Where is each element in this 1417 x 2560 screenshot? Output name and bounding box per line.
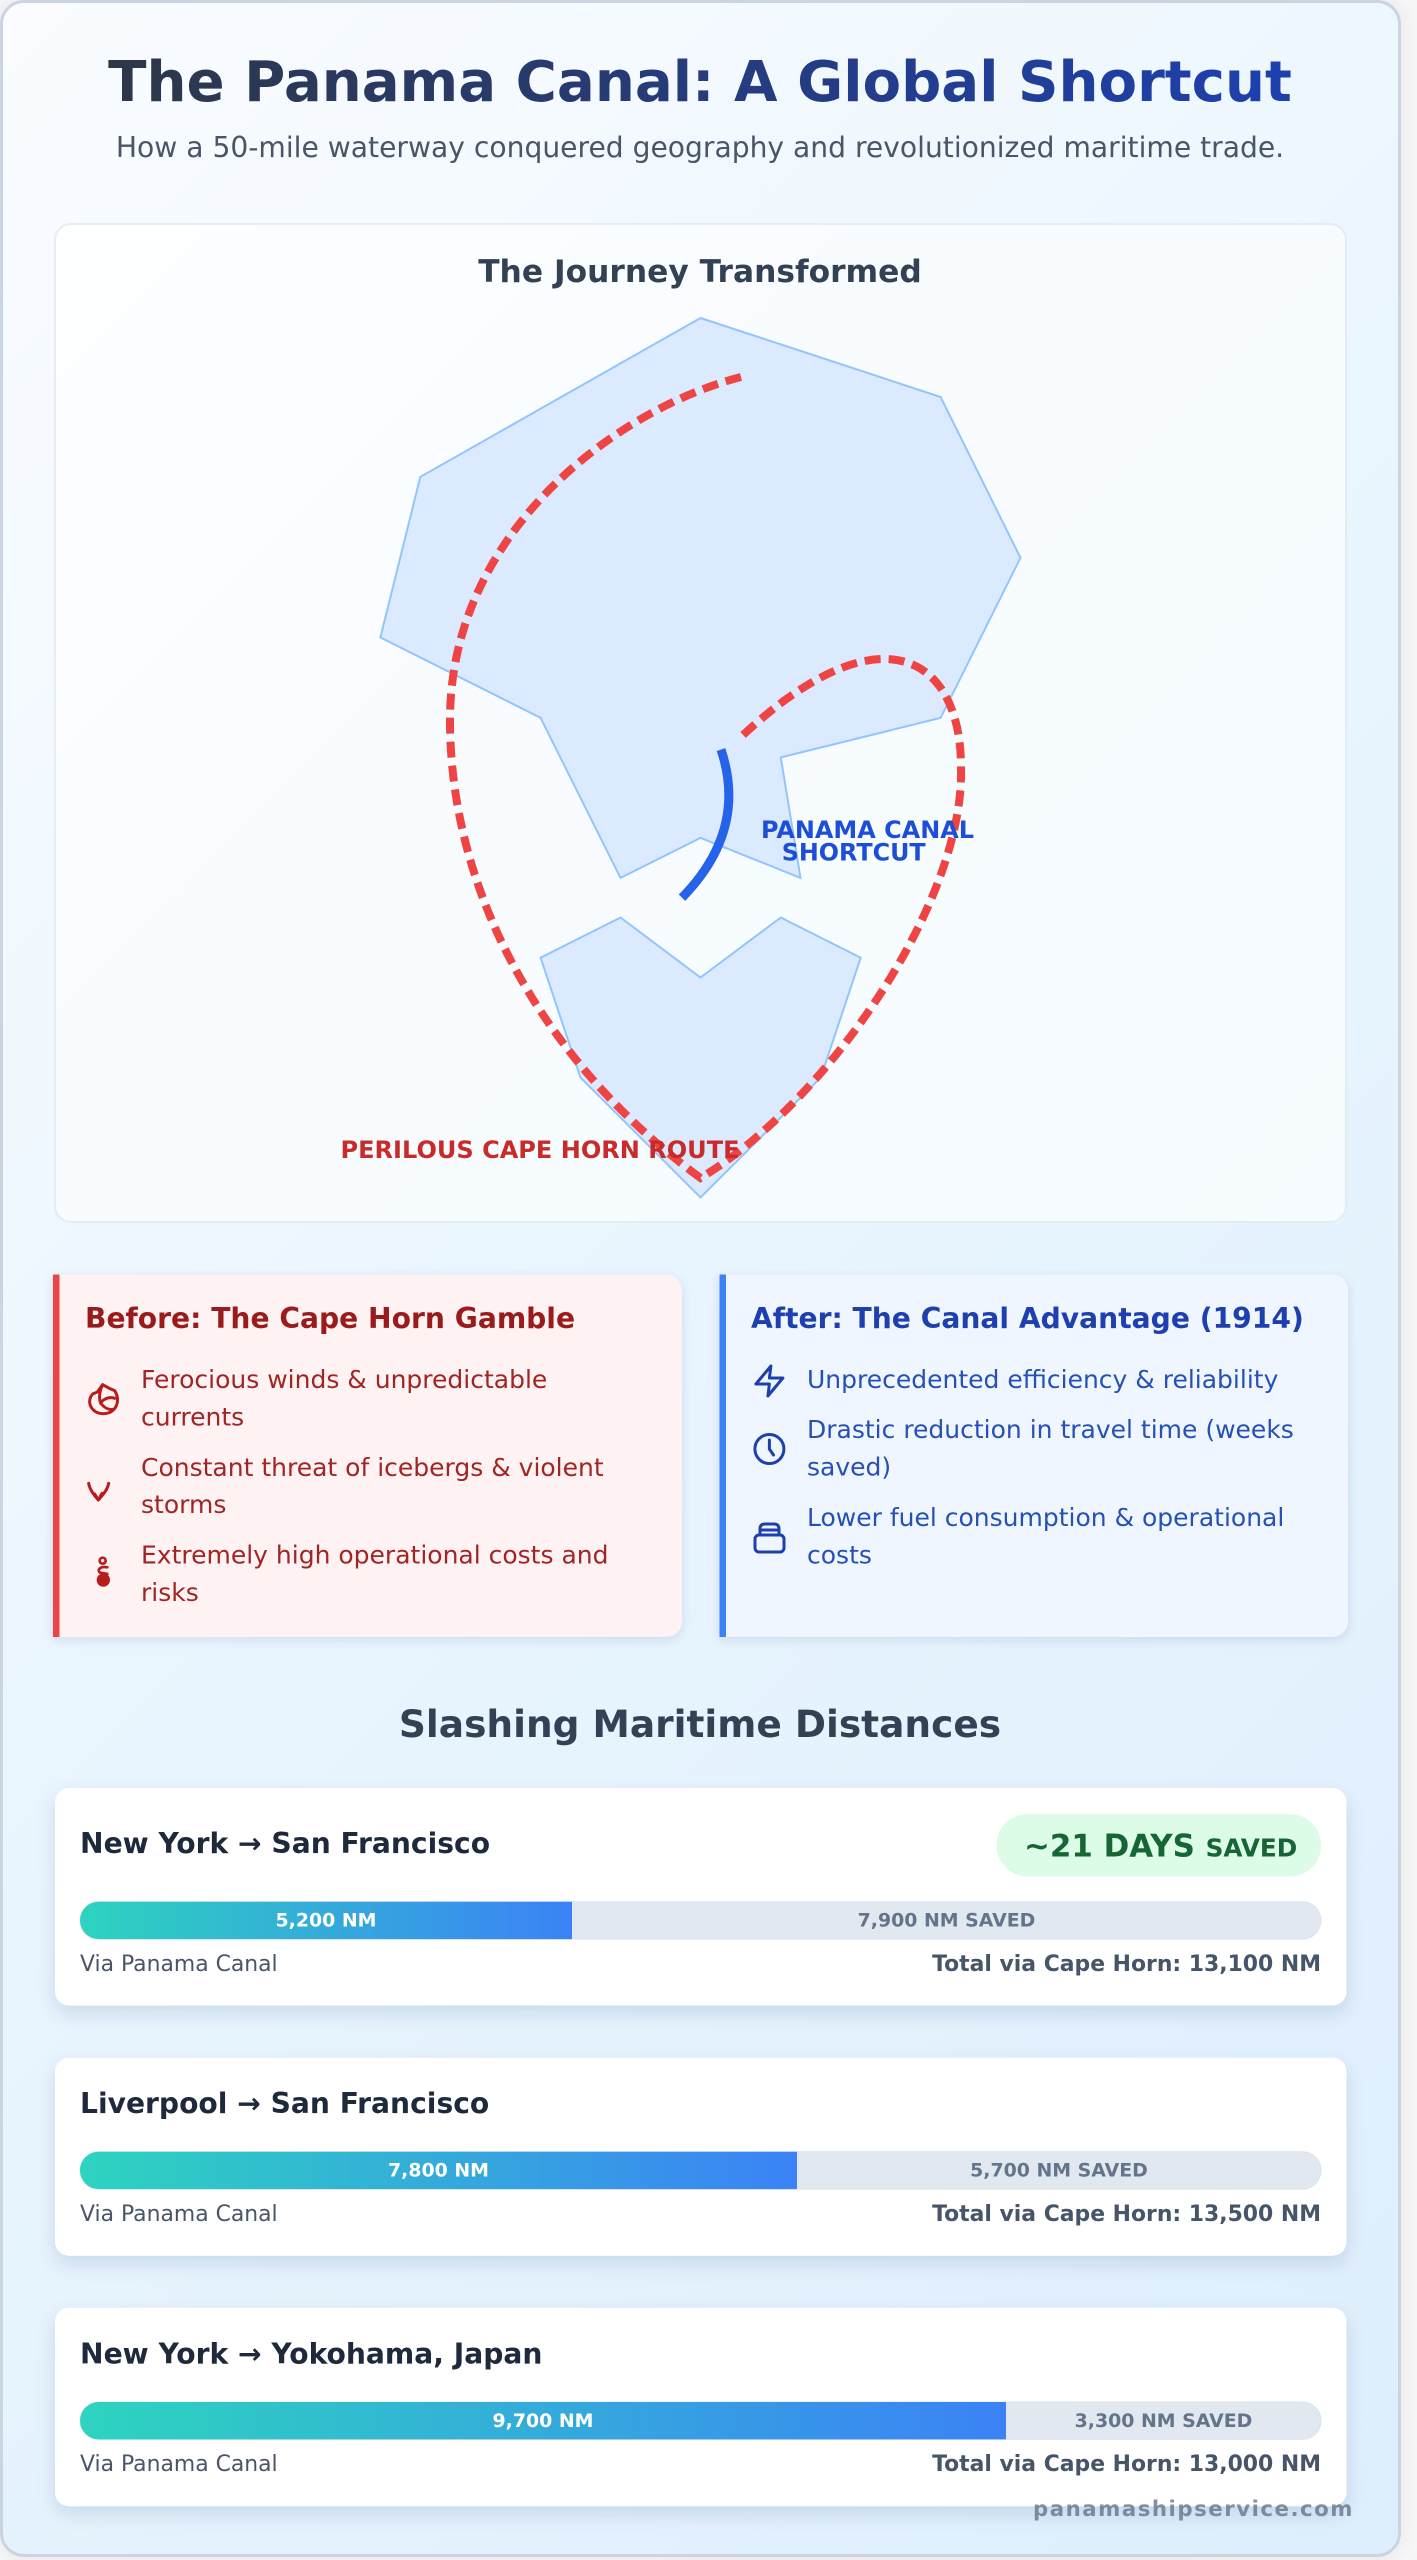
card: liverpool to san francisco — [55, 2058, 1346, 2256]
icon: fuel package — [755, 1524, 784, 1552]
panel: before — [53, 1274, 682, 1637]
bar chart: distance: 5,200 NM — [276, 1910, 376, 1932]
icon: clock — [755, 1434, 784, 1464]
badge: days saved: ~21 DAYS SAVED — [1024, 1828, 1297, 1864]
total label: Total via Cape Horn: 13,100 NM — [932, 1952, 1321, 1977]
after item 3: Lower fuel consumption & operational — [807, 1503, 1284, 1532]
via label: Via Panama Canal — [80, 1952, 278, 1977]
before item 1: Ferocious winds & unpredictable — [141, 1365, 547, 1394]
bar chart: distance: 7,800 NM — [388, 2160, 489, 2182]
after item 2: saved) — [807, 1452, 891, 1482]
icon: wind flame — [90, 1385, 118, 1414]
bar chart: distance — [80, 2402, 1321, 2439]
bar chart: distance: 5,700 NM SAVED — [970, 2160, 1148, 2182]
panel: the journey transformed map — [55, 224, 1346, 1222]
before item 2: Constant threat of icebergs & violent — [141, 1453, 604, 1482]
card: new york to san francisco — [55, 1788, 1346, 2006]
before item 1: currents — [141, 1402, 244, 1432]
subtitle: How a 50-mile waterway conquered geography and revolutionized maritime trade. — [116, 131, 1284, 164]
via label: Via Panama Canal — [80, 2452, 278, 2477]
watermark: panamashipservice.com — [1033, 2497, 1354, 2522]
icon: iceberg — [89, 1483, 109, 1500]
total label: Total via Cape Horn: 13,000 NM — [932, 2452, 1321, 2477]
panel: after — [720, 1274, 1348, 1637]
after item 3: costs — [807, 1540, 872, 1570]
route title: New York → San Francisco — [80, 1827, 490, 1860]
bar chart: distance: 9,700 NM — [493, 2410, 593, 2432]
via label: Via Panama Canal — [80, 2202, 278, 2227]
title: The Panama Canal: A Global Shortcut — [108, 50, 1292, 115]
label: perilous cape horn route: PERILOUS CAPE HORN ROUTE — [340, 1136, 740, 1164]
total label: Total via Cape Horn: 13,500 NM — [932, 2202, 1321, 2227]
before item 3: Extremely high operational costs and — [141, 1540, 608, 1570]
card: new york to yokohama — [55, 2308, 1346, 2506]
route: cape horn dashed route — [450, 377, 961, 1178]
icon: costs and risks — [98, 1558, 109, 1585]
label: panama canal shortcut — [761, 816, 974, 867]
before item 2: storms — [141, 1490, 226, 1519]
bar chart: distance — [80, 1902, 1321, 1939]
badge: days saved — [996, 1814, 1321, 1876]
map: north america landmass — [380, 318, 1020, 878]
bar chart: distance: 7,900 NM SAVED — [858, 1910, 1035, 1932]
after item 2: Drastic reduction in travel time (weeks — [807, 1415, 1294, 1444]
bar chart: distance: 3,300 NM SAVED — [1075, 2410, 1252, 2432]
before heading: Before: The Cape Horn Gamble — [85, 1302, 575, 1335]
bar chart: distance — [80, 2152, 1321, 2189]
icon: lightning bolt — [756, 1366, 783, 1396]
route title: Liverpool → San Francisco — [80, 2087, 489, 2120]
section heading: Slashing Maritime Distances — [399, 1702, 1001, 1746]
map heading: The Journey Transformed — [478, 254, 922, 290]
label: panama canal shortcut: SHORTCUT — [782, 839, 926, 867]
after heading: After: The Canal Advantage (1914) — [751, 1302, 1304, 1335]
label: panama canal shortcut: PANAMA CANAL — [761, 816, 974, 844]
map: south america landmass — [541, 918, 861, 1198]
route title: New York → Yokohama, Japan — [80, 2337, 542, 2370]
after item 1: Unprecedented efficiency & reliability — [807, 1365, 1279, 1394]
route: panama canal shortcut — [682, 750, 729, 898]
before item 3: risks — [141, 1578, 199, 1607]
